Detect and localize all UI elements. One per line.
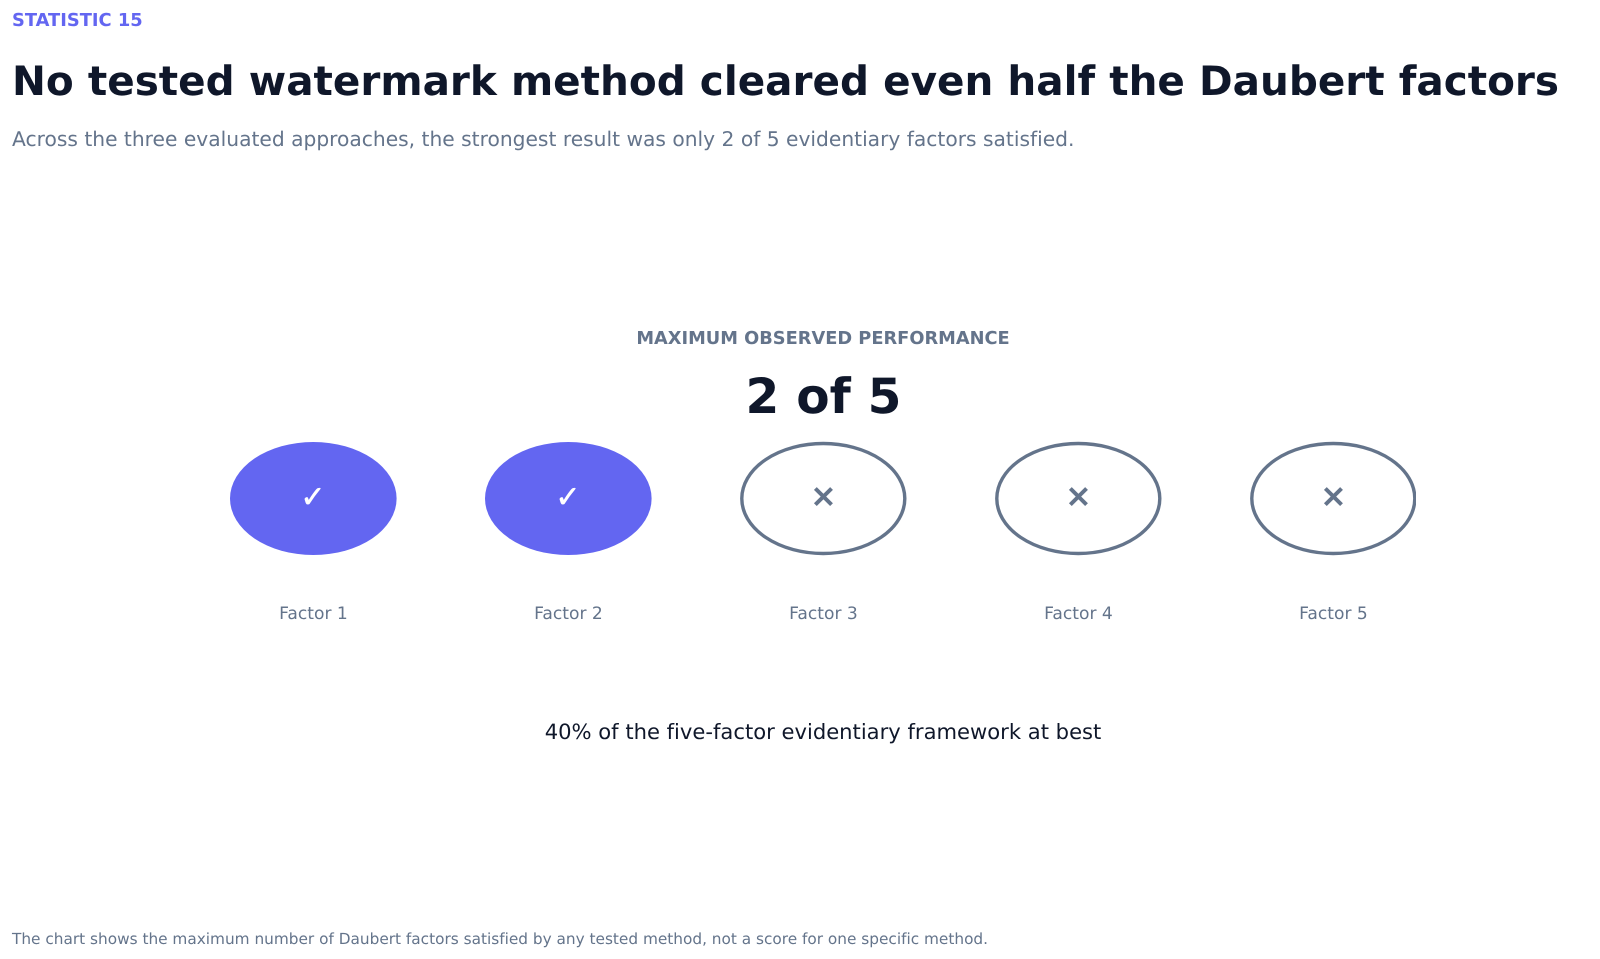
factor 3: not satisfied: Factor 3 [789, 604, 858, 624]
factor 2: satisfied: Factor 2 [534, 604, 603, 624]
panel heading: MAXIMUM OBSERVED PERFORMANCE [636, 328, 1010, 349]
factor 5: not satisfied: Factor 5 [1299, 604, 1368, 624]
factor 4: not satisfied [997, 444, 1160, 624]
factor 1: satisfied [230, 442, 397, 624]
factor 3: not satisfied [742, 444, 905, 624]
factor 5: not satisfied: ✕ [1321, 480, 1346, 516]
eyebrow label: STATISTIC 15 [12, 10, 143, 31]
factor 1: satisfied: ✓ [300, 480, 326, 515]
subtitle: Across the three evaluated approaches, the strongest result was only 2 of 5 evidentiary factors satisfied. [12, 127, 1074, 151]
title: No tested watermark method cleared even half the Daubert factors [12, 57, 1559, 105]
big number: 2 of 5 [746, 369, 901, 425]
factor indicators chart [230, 442, 1416, 624]
factor 4: not satisfied: Factor 4 [1044, 604, 1113, 624]
summary caption: 40% of the five-factor evidentiary framework at best [545, 719, 1101, 744]
factor 4: not satisfied: ✕ [1066, 480, 1091, 516]
factor 5: not satisfied [1252, 444, 1415, 624]
factor 2: satisfied: ✓ [555, 480, 581, 515]
factor 3: not satisfied: ✕ [811, 480, 836, 516]
factor 1: satisfied: Factor 1 [279, 604, 348, 624]
factor 2: satisfied [485, 442, 652, 624]
footnote: The chart shows the maximum number of Daubert factors satisfied by any tested method, not a score for one specific method. [12, 930, 988, 948]
panel: maximum observed performance [230, 328, 1416, 744]
